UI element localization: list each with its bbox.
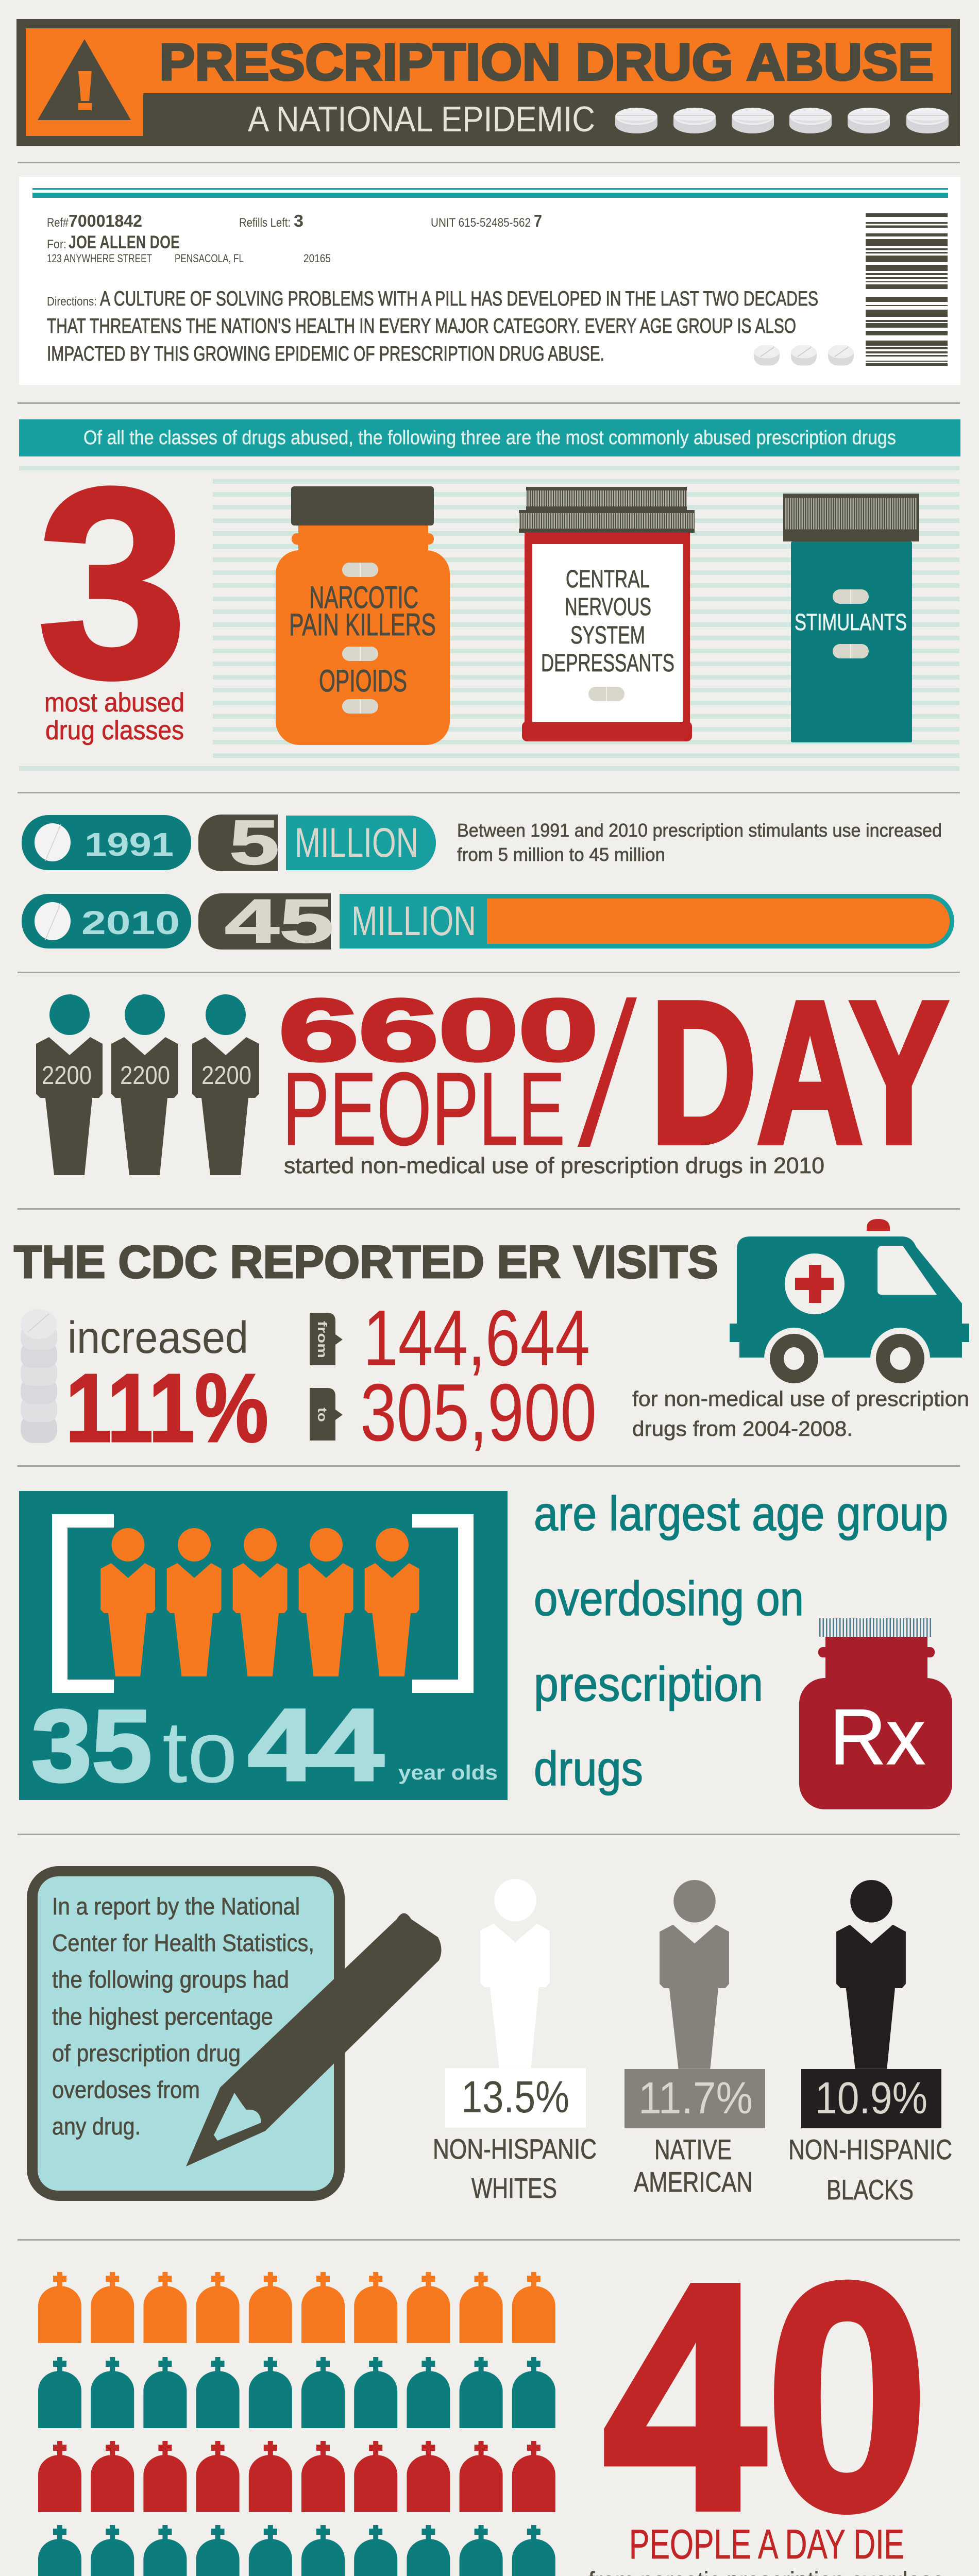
text: stimulants description: Between 1991 and 2010 prescription stimulants use increased [457, 820, 942, 841]
text: largest age group: drugs [534, 1741, 643, 1795]
icon: ambulance [730, 1219, 969, 1389]
text: stimulants description [457, 820, 942, 865]
big number 3: most abused [44, 688, 184, 718]
panel: 35 to 44 year olds [19, 1491, 508, 1803]
red bottle: central nervous system depressants: NERVOUS [565, 594, 651, 621]
from 144,644 [310, 1294, 590, 1382]
prescription reference fields: JOE ALLEN DOE [69, 232, 180, 252]
icon: warning triangle [38, 39, 131, 120]
text: largest age group: overdosing on [534, 1571, 804, 1625]
orange bottle: narcotic pain killers: OPIOIDS [319, 664, 407, 698]
prescription reference fields: 123 ANYWHERE STREET [47, 252, 152, 265]
age range text [31, 1688, 498, 1803]
icon: three pills [754, 345, 854, 366]
stat: 2010 forty-five million: MILLION [351, 898, 476, 944]
title: PRESCRIPTION DRUG ABUSE [159, 33, 934, 91]
text: ER visits caption: drugs from 2004-2008. [632, 1417, 853, 1440]
prescription reference fields: 3 [294, 211, 303, 230]
big number 3: 3 [37, 432, 188, 734]
icon: row of pills [615, 108, 949, 133]
figure: non-Hispanic blacks 10.9%: BLACKS [826, 2174, 914, 2206]
icon: stack of pills [21, 1309, 57, 1443]
icon: three people 2200 each: 2200 [42, 1061, 92, 1090]
figure: non-Hispanic whites 13.5%: 13.5% [461, 2072, 569, 2122]
stat: 6600 people per day: 6600 [279, 981, 598, 1079]
icon: five people [100, 1528, 419, 1676]
from 144,644: 144,644 [363, 1294, 590, 1382]
note text: Center for Health Statistics, [52, 1929, 314, 1956]
striped background [19, 466, 959, 771]
from 144,644: from [315, 1321, 329, 1358]
note text: of prescription drug [52, 2040, 241, 2066]
icon: round pill [35, 823, 71, 861]
panel: report note [27, 1866, 442, 2201]
panel: three drug classes banner [19, 419, 960, 456]
prescription reference fields: UNIT 615-52485-562 [431, 216, 531, 230]
orange bottle: narcotic pain killers: PAIN KILLERS [289, 607, 436, 642]
panel: header banner [16, 19, 960, 146]
directions text: Directions: [47, 295, 97, 309]
stat: 2010 forty-five million: 2010 [81, 904, 180, 941]
to 305,900 [310, 1367, 597, 1458]
prescription reference fields: Ref# [47, 216, 69, 230]
figure: native american 11.7%: NATIVE [654, 2133, 732, 2165]
note text: In a report by the National [52, 1893, 300, 1920]
figure: non-Hispanic blacks 10.9% [788, 1880, 952, 2206]
icon: Rx bottle: Rx [830, 1693, 925, 1781]
icon: three people 2200 each [36, 994, 259, 1175]
prescription reference fields [47, 211, 542, 265]
icon: round pill [35, 902, 71, 940]
figure: native american 11.7%: AMERICAN [634, 2166, 753, 2198]
stat: 1991 five million: 1991 [85, 826, 174, 863]
red bottle: central nervous system depressants: CENTRAL [566, 566, 650, 593]
icon: three people 2200 each: 2200 [201, 1061, 251, 1090]
red bottle: central nervous system depressants: SYSTEM [570, 622, 645, 649]
brackets [52, 1514, 474, 1693]
heading: CDC ER visits: THE CDC REPORTED ER VISITS [14, 1236, 718, 1287]
panel: prescription label [19, 177, 960, 385]
directions text: IMPACTED BY THIS GROWING EPIDEMIC OF PRESCRIPTION DRUG ABUSE. [47, 343, 604, 365]
teal bottle: stimulants: STIMULANTS [795, 609, 907, 635]
orange bottle: narcotic pain killers: NARCOTIC [309, 580, 418, 615]
stat: 1991 five million: 5 [229, 807, 279, 877]
text: stimulants description: from 5 million to 45 million [457, 844, 665, 865]
stat: 2010 forty-five million [22, 887, 954, 956]
icon: barcode [866, 213, 948, 366]
chart: forty tombstones [38, 2272, 555, 2576]
prescription reference fields: PENSACOLA, FL [175, 252, 244, 265]
prescription reference fields: 20165 [303, 252, 331, 265]
to 305,900: 305,900 [360, 1367, 597, 1458]
text: ER visits caption: for non-medical use of prescription [632, 1387, 969, 1411]
panel: three drug classes banner: Of all the classes of drugs abused, the following three are the most commonly abused prescription drugs [83, 427, 896, 449]
stat: 2010 forty-five million: 45 [225, 887, 334, 956]
age range text: 35 [31, 1689, 152, 1803]
stat: increased 111%: 111% [65, 1354, 268, 1463]
figure: non-Hispanic whites 13.5% [433, 1879, 597, 2204]
stat: 1991 five million [22, 807, 436, 877]
stat: 40 people a day: 40 [603, 2217, 929, 2576]
figure: native american 11.7%: 11.7% [638, 2073, 753, 2123]
red bottle: central nervous system depressants: DEPRESSANTS [541, 650, 674, 677]
directions text [47, 287, 818, 365]
figure: non-Hispanic whites 13.5%: WHITES [471, 2172, 557, 2204]
icon: Rx bottle [799, 1628, 952, 1809]
prescription reference fields: 70001842 [69, 211, 142, 230]
prescription reference fields: For: [47, 238, 66, 251]
prescription reference fields: 7 [534, 211, 542, 230]
big number 3: drug classes [45, 716, 184, 745]
subtitle: A NATIONAL EPIDEMIC [248, 99, 595, 139]
icon: pencil [186, 1913, 442, 2166]
note text: overdoses from [52, 2076, 200, 2103]
text: largest age group: prescription [534, 1657, 763, 1711]
age range text: year olds [398, 1761, 498, 1784]
note text: any drug. [52, 2113, 141, 2140]
to 305,900: to [315, 1408, 329, 1422]
stat: 6600 people per day [279, 960, 948, 1185]
note text [52, 1893, 314, 2140]
stat: increased 111%: increased [67, 1313, 248, 1363]
age range text: to [162, 1703, 238, 1801]
figure: native american 11.7% [624, 1880, 765, 2198]
text: 6600 caption: started non-medical use of prescription drugs in 2010 [284, 1153, 824, 1178]
note text: the highest percentage [52, 2003, 273, 2030]
stat: 1991 five million: MILLION [295, 820, 418, 866]
figure: non-Hispanic blacks 10.9%: 10.9% [815, 2073, 927, 2123]
text: ER visits caption [632, 1387, 969, 1440]
teal bottle: stimulants [783, 494, 919, 742]
orange bottle: narcotic pain killers [276, 486, 450, 745]
stat: increased 111% [65, 1313, 268, 1463]
red bottle: central nervous system depressants [519, 487, 695, 741]
age range text: 44 [248, 1688, 384, 1802]
stat: 6600 people per day: PEOPLE [282, 1050, 565, 1167]
icon: three people 2200 each: 2200 [120, 1061, 170, 1090]
figure: non-Hispanic whites 13.5%: NON-HISPANIC [433, 2133, 597, 2165]
text: largest age group [534, 1486, 948, 1795]
note text: the following groups had [52, 1966, 289, 1993]
prescription reference fields: Refills Left: [239, 216, 291, 230]
